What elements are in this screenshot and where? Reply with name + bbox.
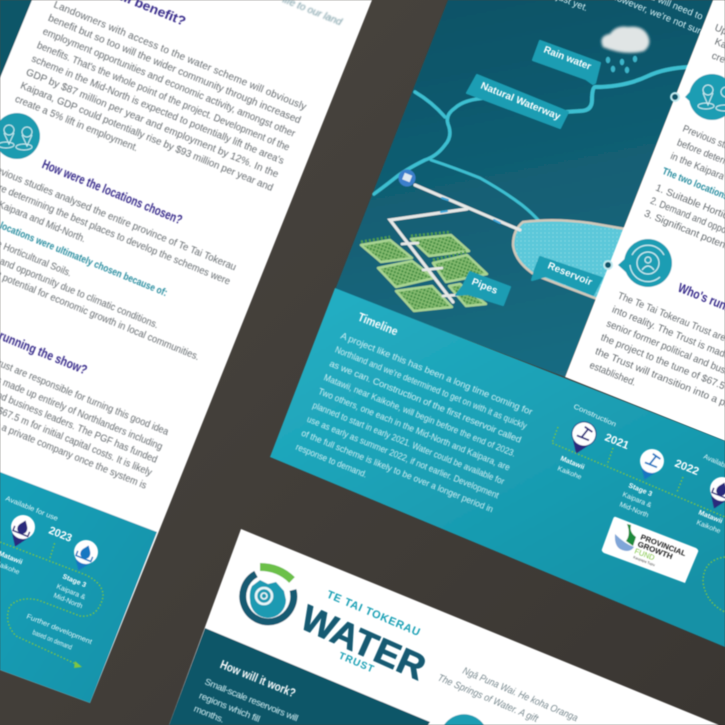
text: map labels: [470, 0, 707, 297]
text: map labels: Reservoir: [546, 261, 594, 288]
paragraph: benefits: Landowners with access to the water scheme will obviously: [52, 0, 308, 113]
text: left timeline labels: Available for use: [4, 495, 59, 523]
text: left timeline labels: based on demand: [31, 629, 73, 652]
text: map labels: Pipes: [470, 277, 499, 297]
panel: bottom brochure sheet: [169, 529, 719, 725]
left sheet white page: [0, 0, 372, 703]
text: logo wordmark: TRUST: [337, 651, 375, 675]
chart: pipes: [390, 185, 520, 302]
text: centre timeline labels: Stage 3: [627, 482, 653, 498]
paragraph: timeline: use as early as summer 2022, if not earlier. Development: [305, 414, 501, 502]
text block: left sheet body copy: [0, 0, 322, 493]
bottom sheet white page: [169, 529, 719, 725]
map background: [335, 0, 713, 377]
paragraph: benefits: create a 5% lift in employment.: [13, 94, 139, 154]
text: centre timeline labels: [556, 403, 725, 567]
panel: left brochure sheet: [0, 0, 372, 703]
text block: right column: [588, 23, 725, 432]
paragraph: timeline: Northland and we're determined to get on with it as quickly: [333, 344, 529, 432]
timeline: centre sheet: [552, 418, 725, 612]
paragraph: benefits: scheme in the Mid-North is expected to potentially lift the area's: [30, 54, 286, 167]
icon: maze bubble: [618, 239, 672, 287]
pin: Matawii: [4, 511, 39, 551]
dotted route: [552, 427, 725, 612]
icon: sun circle: [444, 714, 484, 725]
icon: location bubble: [685, 74, 725, 120]
pin: Matawii construction: [565, 418, 600, 458]
paragraph: benefits: employment opportunities and economic activity, amongst other: [41, 27, 297, 140]
text: left timeline labels: Mid-North: [52, 592, 83, 610]
paragraph: benefits: [13, 0, 308, 208]
arrow head: [74, 661, 82, 668]
panel: centre right white column: [565, 0, 725, 441]
text: centre timeline labels: Mid-North: [618, 501, 649, 519]
text: logo wordmark: TE TAI TOKERAU: [325, 589, 422, 639]
paragraph: timeline: Two others, one each in the Mid-North and Kaipara, are: [316, 386, 512, 474]
text: centre timeline labels: 2022: [673, 458, 701, 478]
pin: Stage 3: [67, 536, 102, 575]
paragraph: trust: [588, 291, 725, 432]
icon: water intake: [398, 170, 416, 186]
paragraph: how it works: Small-scale reservoirs will: [203, 677, 300, 724]
pin: Stage 3 construction: [633, 445, 668, 484]
paragraph: benefits: Kaipara, GDP could potentially rise by $93 million per year and: [19, 81, 274, 194]
icon: map node upper: [671, 93, 679, 101]
panel: timeline strip: [270, 288, 725, 647]
text: centre timeline labels: PROVINCIAL: [639, 532, 688, 558]
left sheet timeline strip: [0, 472, 157, 703]
icon: map node lower: [604, 261, 612, 269]
paragraph: trust: established.: [588, 360, 637, 389]
paragraph: timeline: response to demand.: [294, 442, 369, 481]
left sheet dark corner: [0, 0, 32, 78]
text: centre timeline labels: Construction: [572, 403, 617, 429]
logo card: Provincial Growth Fund: [602, 517, 698, 583]
heading: how will it work: How will it work?: [218, 657, 298, 700]
paragraph: timeline: A project like this has been a long time coming for: [339, 331, 534, 418]
dark panel: [169, 628, 430, 725]
text: left timeline labels: Further development: [25, 613, 93, 646]
text: centre timeline labels: Kaikohe: [695, 519, 721, 535]
paragraph: timeline: of the full scheme is likely to be over a longer period in: [300, 428, 495, 515]
paragraph: timeline: Matawii, near Kaikohe, will begin before the end of 2023.: [322, 372, 517, 460]
text: left timeline labels: 2023: [47, 525, 74, 545]
panel: centre map: [335, 0, 713, 377]
paragraph: how it works: regions which fill: [197, 690, 262, 725]
chart: fields: [361, 235, 487, 311]
chart: waterways: [374, 67, 690, 222]
text: left timeline labels: Kaipara &: [55, 583, 87, 601]
pin: Matawii available: [703, 473, 725, 513]
callout: pipes: [456, 272, 510, 305]
paragraph: timeline: [294, 331, 534, 529]
icon: reservoir lake: [513, 220, 625, 300]
text: left timeline labels: Stage 3: [61, 573, 87, 589]
text: centre timeline labels: GROWTH: [636, 539, 674, 561]
dotted route: [0, 542, 103, 664]
text: map labels: Rain water: [542, 45, 593, 73]
logo: water trust mark: [243, 567, 294, 622]
icon: location pins: [0, 113, 40, 159]
text: map labels: Natural Waterway: [479, 81, 562, 123]
crop tufts: [361, 232, 467, 260]
text: left timeline labels: [0, 495, 93, 652]
text: centre timeline labels: Kaupapa Tupu: [633, 555, 655, 567]
text: centre timeline labels: Matawii: [559, 455, 585, 471]
paragraph: timeline: as we can. Construction of the first reservoir called: [328, 358, 523, 446]
heading: timeline: Timeline: [356, 310, 400, 339]
timeline: left sheet: [0, 511, 103, 668]
paragraph: benefits: benefits. That's the whole point of the project. Development of the: [35, 40, 291, 154]
paragraph: how it works: months.: [192, 703, 226, 725]
text: centre timeline labels: Kaikohe: [556, 465, 582, 481]
paragraph: locations repeat: [642, 122, 725, 264]
text: centre timeline labels: Matawii: [697, 509, 723, 525]
text block: how will it work: [192, 654, 309, 725]
icon: rain cloud: [602, 27, 649, 73]
callout: natural waterway: [467, 75, 568, 128]
paragraph: benefits: GDP by $87 million per year and employment by 12%. In the: [24, 67, 280, 181]
paragraph: locations: [0, 162, 238, 363]
callout: rain water: [533, 41, 600, 84]
text: logo wordmark: WATER: [295, 597, 432, 688]
callout: reservoir: [532, 257, 602, 295]
heading: how were the locations chosen: How were the locations chosen?: [40, 156, 185, 227]
text block: timeline copy: [294, 306, 544, 529]
paragraph: timeline: planned to start in early 2021. Water could be available for: [311, 400, 506, 487]
paragraph: benefits: benefit but so too will the wider community through increased: [46, 13, 302, 126]
text: centre timeline labels: 2021: [603, 432, 631, 452]
white column: [565, 0, 725, 441]
text: centre timeline labels: Kaipara &: [621, 491, 653, 509]
text: centre timeline labels: FUND: [633, 546, 657, 563]
